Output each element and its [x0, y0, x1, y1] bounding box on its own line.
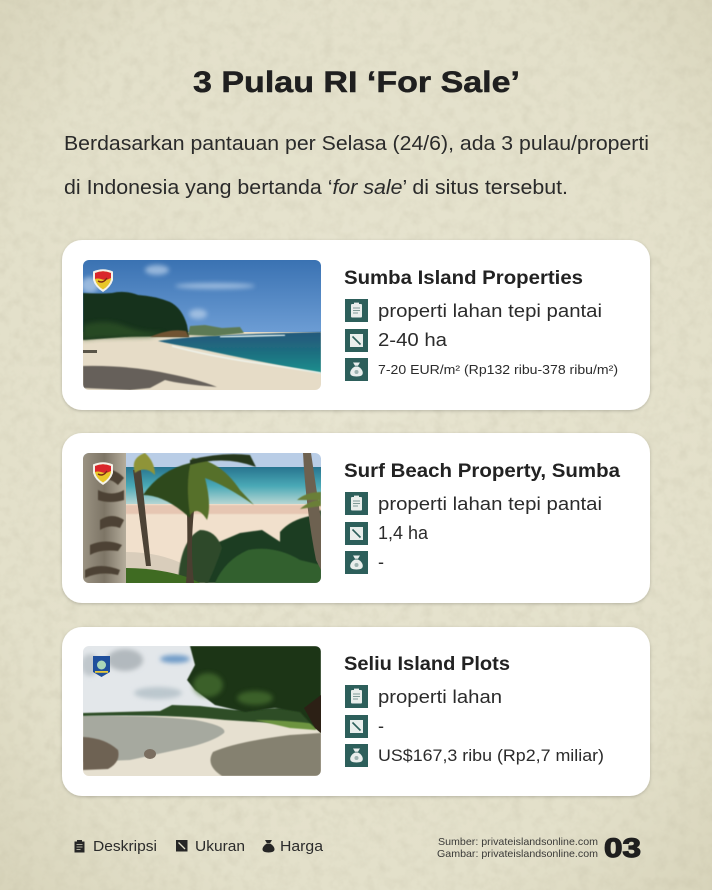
heading: Sumba Island Properties — [344, 267, 583, 289]
row: price: US$167,3 ribu (Rp2,7 miliar) — [378, 747, 604, 765]
legend item: Ukuran — [176, 839, 245, 855]
row: description: properti lahan — [378, 687, 502, 707]
panel: Sumba Island Properties — [62, 240, 650, 410]
legend — [74, 839, 324, 855]
card background — [62, 240, 650, 410]
crest: Sumba regency — [93, 269, 113, 292]
legend item: Harga: Harga — [280, 839, 324, 855]
row: description — [345, 685, 502, 708]
row: price — [345, 551, 384, 574]
card background — [62, 433, 650, 603]
intro text: di Indonesia yang bertanda ‘ for sale’ di situs tersebut. — [64, 177, 568, 199]
legend item: Harga — [262, 839, 324, 855]
sources — [437, 836, 598, 860]
intro text: Berdasarkan pantauan per Selasa (24/6), ada 3 pulau/properti — [64, 133, 649, 155]
row: price: 7-20 EUR/m² (Rp132 ribu-378 ribu/m²) — [378, 363, 618, 377]
row: size: - — [378, 716, 384, 736]
sources: Gambar: privateislandsonline.com — [437, 848, 598, 860]
row: description: properti lahan tepi pantai — [378, 301, 602, 321]
row: price — [345, 358, 618, 381]
card background — [62, 627, 650, 796]
row: price — [345, 744, 604, 767]
photo: palm trees on beach — [83, 453, 321, 584]
photo: Sumba beach with green headland — [81, 260, 321, 392]
row: size: 2-40 ha — [378, 330, 448, 350]
row: description — [345, 492, 602, 515]
heading: Seliu Island Plots — [344, 653, 510, 675]
heading: Surf Beach Property, Sumba — [344, 460, 620, 482]
photo: Seliu beach with large tree — [81, 646, 321, 778]
row: size — [345, 329, 448, 352]
legend item: Deskripsi: Deskripsi — [93, 839, 157, 855]
row: description — [345, 299, 602, 322]
title: 3 Pulau RI ‘For Sale’ — [193, 66, 520, 99]
legend item: Ukuran: Ukuran — [195, 839, 245, 855]
row: size: 1,4 ha — [378, 523, 429, 543]
row: size — [345, 522, 429, 545]
sources: Sumber: privateislandsonline.com — [438, 836, 598, 848]
panel: Seliu Island Plots — [62, 627, 650, 796]
row: size — [345, 715, 384, 738]
crest: Kepulauan Bangka Belitung — [93, 656, 110, 677]
crest: Sumba regency — [93, 462, 113, 485]
intro text — [64, 133, 649, 199]
page number: 03 — [604, 833, 641, 863]
row: price: - — [378, 552, 384, 572]
panel: Surf Beach Property, Sumba — [62, 433, 650, 603]
row: description: properti lahan tepi pantai — [378, 494, 602, 514]
